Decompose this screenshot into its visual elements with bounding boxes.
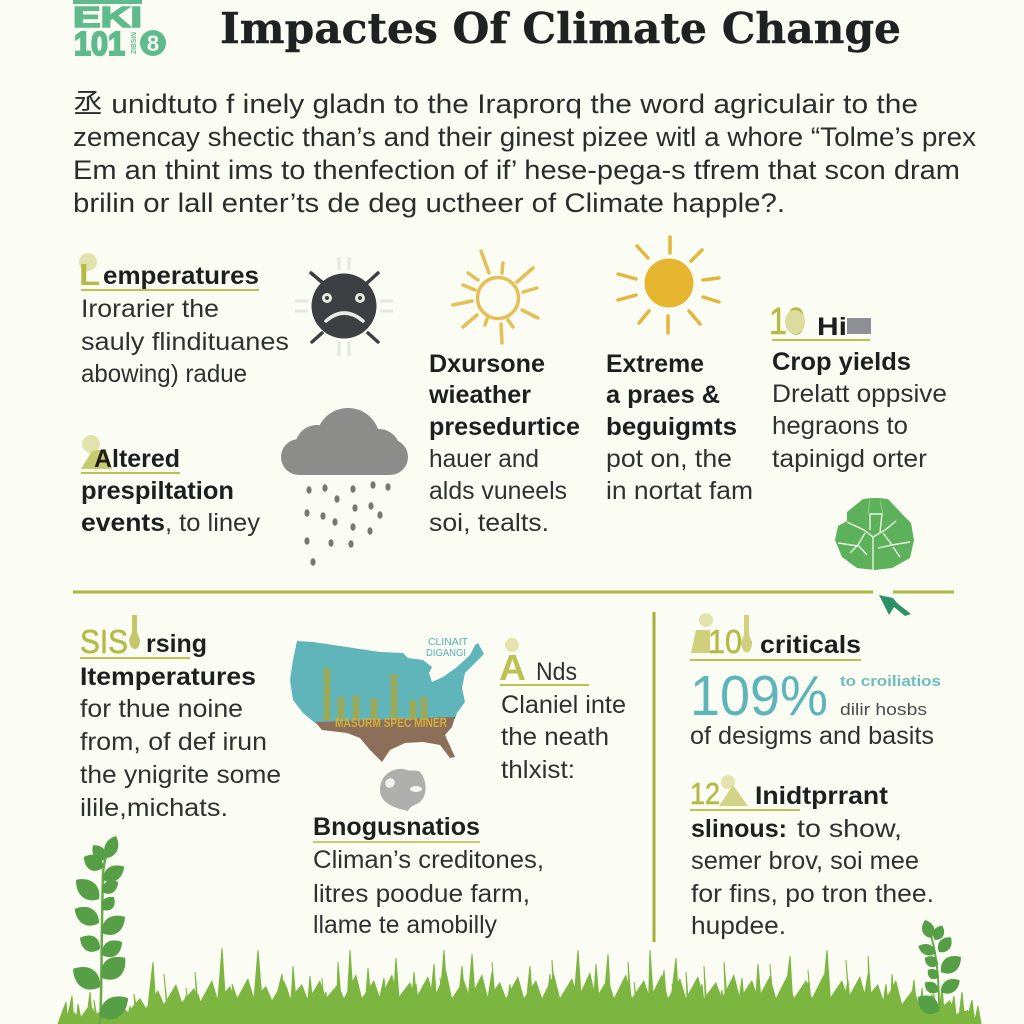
map: climate zones with crops	[290, 637, 484, 762]
panel: ands: the neath	[501, 723, 609, 751]
icon: criticals badge	[691, 613, 752, 660]
panel: ands: thlxist:	[501, 756, 575, 784]
panel: extreme weather column	[428, 350, 580, 537]
panel: crop yields: Hi	[817, 313, 847, 341]
panel: extreme weather column: wieather	[428, 381, 531, 409]
panel: extreme column: a praes &	[606, 381, 720, 409]
stat: 109%: 109%	[690, 664, 828, 728]
intro paragraph: brilin or lall enter’ts de deg uctheer of Climate happle?.	[73, 188, 785, 218]
icon: precipitation badge	[81, 435, 112, 469]
panel: rising temperatures: from, of def irun	[80, 728, 267, 756]
icon: temperatures badge: L	[79, 257, 100, 292]
panel: crop yields: Drelatt oppsive	[772, 380, 947, 408]
panel: temperatures: sauly flindituanes	[81, 328, 289, 356]
icon: sad dark sun	[295, 257, 393, 356]
panel: important stat: slinous:	[691, 815, 787, 843]
panel: bnogusnatios: Climan’s creditones,	[313, 846, 544, 874]
panel: rising temperatures: rsing	[146, 630, 207, 658]
panel: extreme weather column: Dxursone	[429, 350, 545, 378]
panel: extreme column: beguigmts	[606, 413, 737, 441]
panel: ands: Claniel inte	[501, 691, 626, 719]
panel: extreme weather column: soi, tealts.	[429, 509, 549, 537]
icon: criticals badge: 10	[708, 623, 742, 660]
panel: important stat: semer brov, soi mee	[691, 847, 919, 875]
icon: crop yields badge: 10	[769, 301, 805, 343]
panel: temperatures: emperatures	[103, 262, 259, 290]
icon: rain cloud	[281, 408, 408, 566]
panel: extreme column	[606, 350, 753, 505]
panel: bnogusnatios: llame te amobilly	[313, 911, 497, 939]
map: climate zones with crops: CLINAIT	[428, 637, 468, 648]
icon: A badge: A	[499, 647, 526, 688]
panel: extreme column: in nortat fam	[606, 477, 753, 505]
panel: crop yields	[769, 301, 947, 473]
logo: 8	[147, 31, 159, 56]
logo	[73, 0, 166, 62]
map: climate zones with crops: DIGANGI	[426, 648, 466, 659]
intro paragraph	[73, 89, 977, 218]
icon: 12 badge	[690, 775, 748, 811]
panel: altered precipitation: prespiltation	[81, 477, 234, 505]
panel: ands	[499, 638, 626, 784]
divider	[73, 590, 954, 594]
panel: extreme weather column: alds vuneels	[429, 477, 567, 505]
icon: gray globe blob	[380, 769, 426, 811]
panel: rising temperatures: the ynigrite some	[80, 761, 281, 789]
plant: left vine	[67, 833, 134, 1024]
panel: bnogusnatios: litres poodue farm,	[313, 880, 530, 908]
panel: important stat: hupdee.	[691, 912, 786, 940]
plant: right vine	[913, 918, 966, 1019]
panel: crop yields: hegraons to	[772, 412, 908, 440]
panel: rising temperatures: for thue noine	[80, 695, 243, 723]
panel: criticals stat: criticals	[760, 631, 861, 659]
panel: temperatures	[79, 253, 289, 388]
icon: 12 badge: 12	[690, 776, 720, 811]
panel: rising temperatures: ilile,michats.	[80, 794, 228, 822]
panel: extreme column: Extreme	[606, 350, 704, 378]
icon: green recycling leaf	[835, 498, 914, 570]
panel: criticals stat: to croiliatios	[840, 673, 941, 690]
intro paragraph: Em an thint ims to thenfection of if’ hese-pega-s tfrem that scon dram	[73, 155, 960, 185]
panel: extreme weather column: presedurtice	[429, 413, 580, 441]
panel: bnogusnatios: Bnogusnatios	[313, 813, 480, 841]
map: climate zones with crops: MASURM SPEC MINER	[335, 715, 447, 730]
panel: extreme weather column: hauer and	[429, 445, 539, 473]
panel: temperatures: abowing) radue	[81, 360, 247, 388]
panel: important stat: to show,	[797, 815, 902, 843]
panel: rising temperatures	[80, 615, 281, 822]
icon: outlined sun	[453, 251, 538, 343]
panel: criticals stat: of desigms and basits	[690, 722, 934, 750]
panel: extreme column: pot on, the	[606, 445, 732, 473]
panel: criticals stat: dilir hosbs	[840, 700, 927, 719]
panel: important stat: for fins, po tron thee.	[691, 880, 934, 908]
panel: altered precipitation: , to liney	[165, 509, 261, 537]
logo: EKI	[73, 2, 142, 34]
panel: ands: Nds	[536, 658, 577, 686]
intro paragraph: zemencay shectic than’s and their ginest pizee witl a whore “Tolme’s prex	[73, 122, 977, 152]
icon: filled sun	[618, 237, 719, 333]
panel: altered precipitation: events	[81, 509, 165, 537]
panel: important stat	[690, 775, 934, 940]
panel: bnogusnatios	[313, 813, 544, 939]
icon: rising badge: SIS	[80, 623, 128, 660]
title: Impactes Of Climate Change	[220, 4, 901, 53]
arrow	[879, 595, 911, 616]
panel: criticals stat	[690, 613, 941, 750]
logo: ZIBSIN	[131, 32, 138, 54]
intro paragraph: 丞 unidtuto f inely gladn to the Iraprorq the word agriculair to the	[73, 89, 918, 119]
panel: rising temperatures: Itemperatures	[80, 663, 256, 691]
panel: altered precipitation	[81, 435, 261, 537]
panel: altered precipitation: Altered	[94, 445, 180, 473]
logo: 101	[74, 25, 125, 62]
panel: important stat: Inidtprrant	[755, 782, 889, 810]
grass strip	[58, 948, 981, 1024]
panel: temperatures: Irorarier the	[81, 295, 219, 323]
panel: crop yields: Crop yields	[772, 348, 911, 376]
panel: crop yields: tapinigd orter	[772, 445, 927, 473]
